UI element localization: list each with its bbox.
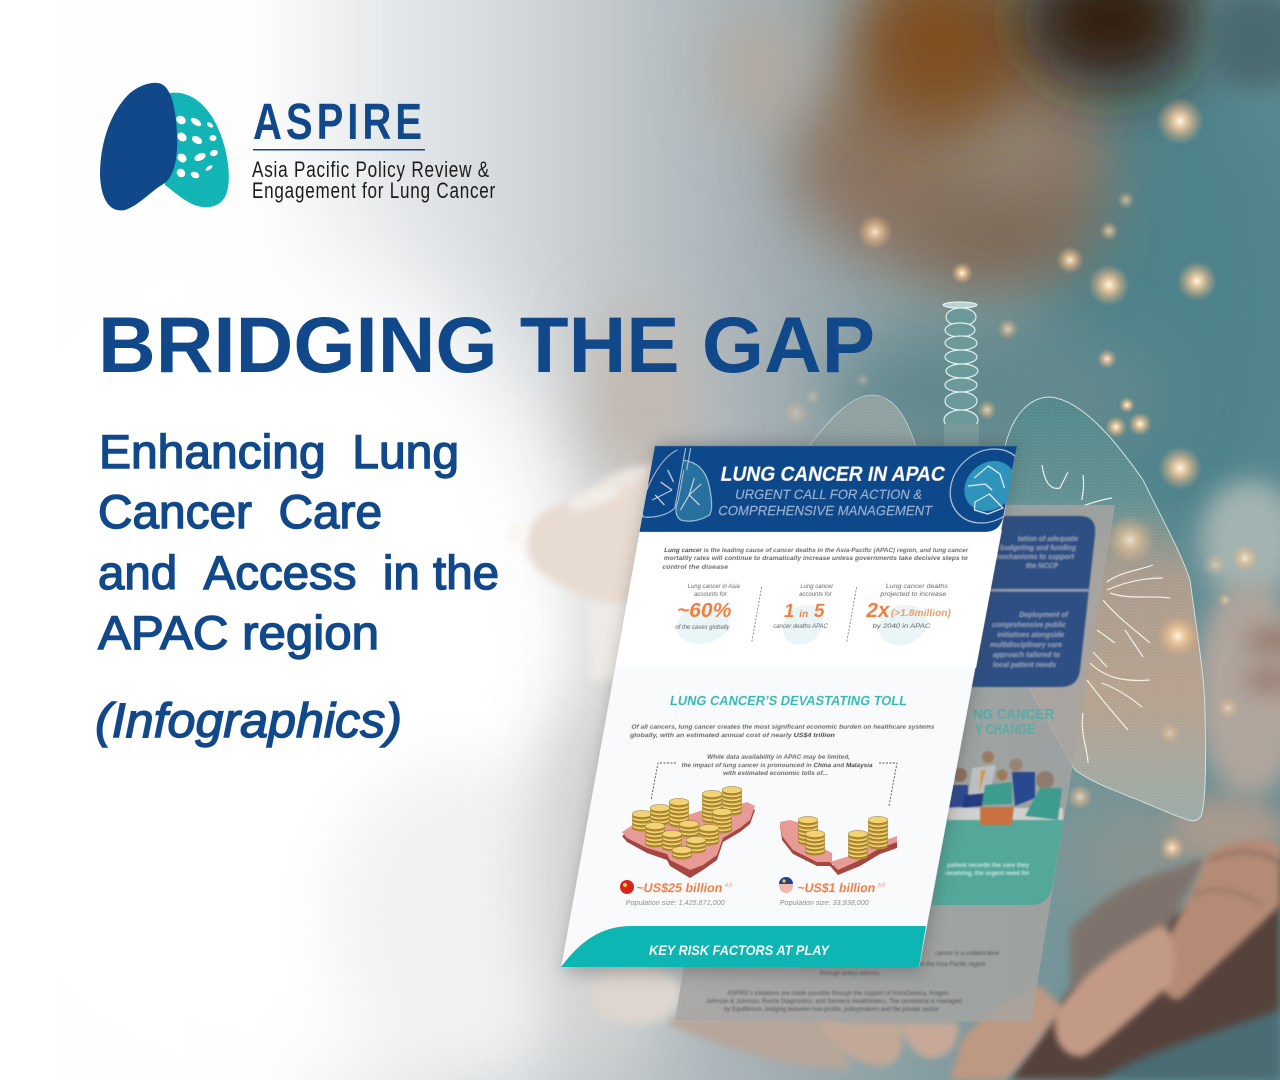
- illustration: meeting group: [948, 751, 1063, 825]
- back sheet footer text: in the Asia Pacific region: [920, 962, 985, 968]
- intro text: [661, 547, 970, 571]
- back sheet heading: NG CANCER: [973, 706, 1054, 723]
- footer band: [561, 926, 926, 967]
- header subtitle: [717, 486, 937, 518]
- stat: 1 in 5: [770, 584, 836, 645]
- navy lung: [100, 83, 177, 210]
- navy recommendation panel: local patient needs: [993, 662, 1056, 669]
- navy recommendation panel: budgeting and funding: [1000, 545, 1077, 552]
- illustration: left lung top: [808, 395, 916, 447]
- finger five: [820, 1022, 903, 1066]
- dashed connectors: [651, 763, 897, 806]
- logo rule: [253, 149, 425, 150]
- subtitle: APAC region: [98, 606, 379, 659]
- finger four: [900, 1022, 958, 1058]
- decorative bokeh lights: [505, 97, 1259, 862]
- header band: [640, 446, 1017, 532]
- bronchial branches: [1042, 465, 1170, 763]
- cupped hand, lower right: [590, 840, 1280, 1080]
- header subtitle: COMPREHENSIVE MANAGEMENT: [717, 502, 934, 518]
- China value: ~US$25 billion: [635, 880, 724, 895]
- illustration: trachea: [943, 302, 979, 448]
- back sheet heading: [973, 706, 1054, 738]
- teal back panel: [932, 819, 1064, 905]
- stat: 60 percent: Lung cancer in Asia: [687, 584, 741, 590]
- navy recommendation panel: multidisciplinary care: [990, 642, 1062, 649]
- intro text: control the disease: [662, 564, 729, 571]
- stat dividers: [752, 587, 857, 642]
- intro text: mortality rates will continue to dramatically increase unless governments take decisive steps to: [663, 555, 968, 562]
- icon: Malaysia flag: [779, 877, 793, 893]
- stat: 2x: (>1.8million): [890, 608, 952, 619]
- Malaysia value reference: 5,6: [877, 883, 885, 889]
- map: China with coin stacks: [622, 786, 755, 878]
- back sheet footer text: Johnson & Johnson, Roche Diagnostics, and Siemens Healthineers. The secretariat is managed: [706, 999, 962, 1005]
- section text: [622, 724, 935, 777]
- stat: 1 in 5: cancer deaths APAC: [773, 624, 829, 630]
- teal panel text: receiving, the urgent need for: [945, 871, 1030, 877]
- logo tagline: Asia Pacific Policy Review &: [252, 157, 490, 182]
- footer band title: KEY RISK FACTORS AT PLAY: [649, 942, 831, 958]
- stat: 60 percent: [671, 584, 741, 644]
- stat: 1 in 5: Lung cancer: [800, 584, 834, 590]
- header title: LUNG CANCER IN APAC: [719, 463, 947, 486]
- stat: 2x: by 2040 in APAC: [872, 624, 932, 630]
- intro text: Lung cancer is the leading cause of cancer deaths in the Asia-Pacific (APAC) region, and lung cancer: [664, 547, 969, 554]
- navy recommendation panel: initiatives alongside: [997, 632, 1064, 639]
- logo tagline: [252, 157, 496, 203]
- header subtitle: URGENT CALL FOR ACTION &: [734, 486, 924, 502]
- teal lung: [165, 93, 229, 207]
- China population: Population size: 1,425,671,000: [625, 900, 725, 907]
- navy recommendation panel: Deployment of: [1019, 612, 1069, 619]
- stat: 2x: 2x: [864, 599, 892, 622]
- subtitle: and Access in the: [98, 546, 499, 599]
- section text: the impact of lung cancer is pronounced in China and Malaysia: [681, 762, 873, 769]
- finger two: [1055, 925, 1174, 1057]
- stat: 60 percent: ~60%: [675, 599, 734, 622]
- back document sheet: [675, 505, 1115, 1022]
- back sheet heading: Y CHANGE: [975, 721, 1035, 738]
- back sheet footer text: through policy reforms: [820, 971, 879, 977]
- stat: 60 percent: accounts for: [693, 592, 727, 598]
- map: Malaysia with coin stacks: [780, 816, 897, 875]
- back sheet footer text: cancer is a collaborative: [935, 951, 1000, 957]
- logo tagline: Engagement for Lung Cancer: [252, 178, 496, 203]
- logo wordmark: ASPIRE: [253, 93, 426, 150]
- navy recommendation panel: comprehensive public: [992, 622, 1066, 629]
- subtitle: Enhancing Lung: [99, 425, 459, 478]
- stat: 2x: [860, 584, 956, 645]
- icon: China flag: [620, 880, 634, 894]
- navy recommendation panel: the NCCP: [1026, 563, 1058, 570]
- coin stacks: [798, 816, 888, 860]
- infographics label: (Infographics): [95, 695, 402, 748]
- sheet drop shadow: [565, 444, 1015, 972]
- navy recommendation panel: mechanisms to support: [995, 554, 1075, 561]
- sheet body: [561, 446, 1017, 967]
- stat: 2x: projected to increase: [880, 592, 947, 598]
- Malaysia value: ~US$1 billion: [796, 880, 877, 895]
- teal panel text: [945, 863, 1030, 877]
- navy recommendation panel: [970, 516, 1095, 687]
- stat: 1 in 5: 1 in 5: [782, 601, 827, 622]
- coin stacks: [632, 786, 742, 860]
- icon: header globe: [949, 448, 1016, 524]
- front document sheet: [559, 446, 1032, 967]
- back sheet footer text: ASPIRE's initiatives are made possible through the support of AstraZeneca, Amgen,: [727, 991, 950, 997]
- Malaysia population: Population size: 33,938,000: [779, 900, 869, 907]
- icon: header lungs: [639, 448, 722, 521]
- teal panel text: patient records the care they: [947, 863, 1030, 869]
- section text: with estimated economic tolls of...: [721, 770, 829, 777]
- stat: 1 in 5: accounts for: [798, 592, 832, 598]
- China value reference: 4,5: [724, 883, 732, 889]
- illustration: right lung: [980, 397, 1206, 821]
- subtitle: [98, 425, 499, 659]
- navy recommendation panel: tation of adequate: [1018, 536, 1078, 543]
- blurred supporting hand, left: [527, 462, 660, 680]
- finger one: [1157, 840, 1280, 999]
- section heading: LUNG CANCER’S DEVASTATING TOLL: [669, 692, 909, 708]
- finger three: [950, 985, 1060, 1080]
- glow over lung: [1104, 446, 1202, 745]
- back sheet footer text: by Equilibrium, bridging between non-profits, policymakers and the private sector: [724, 1007, 938, 1013]
- back sheet footer text: [706, 951, 1000, 1013]
- section text: globally, with an estimated annual cost of nearly US$4 trillion: [629, 732, 836, 739]
- title: BRIDGING THE GAP: [98, 300, 875, 389]
- section text: While data availability in APAC may be limited,: [706, 754, 851, 761]
- logo mark: [100, 83, 229, 210]
- subtitle: Cancer Care: [98, 485, 382, 538]
- section text: Of all cancers, lung cancer creates the most significant economic burden on healthcare systems: [631, 724, 935, 731]
- navy recommendation panel: approach tailored to: [993, 652, 1061, 659]
- stat: 2x: Lung cancer deaths: [885, 584, 948, 590]
- white network pattern: [175, 114, 219, 179]
- stat: 60 percent: of the cases globally: [675, 625, 730, 631]
